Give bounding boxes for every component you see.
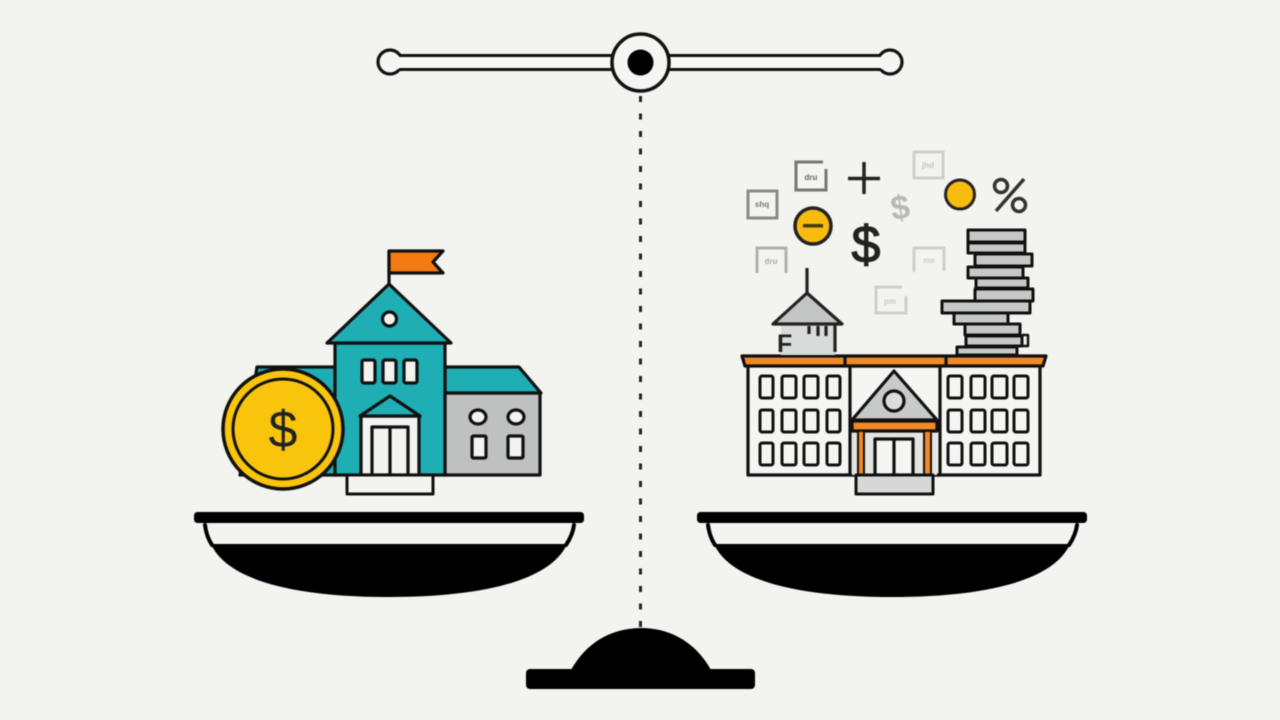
university portico [850,366,940,475]
orange roof band [742,356,1046,366]
beam pivot [612,34,669,91]
scale base [526,628,755,689]
document icon 5 [914,248,944,272]
left window grid [760,376,840,465]
large university building [742,356,1046,494]
document icon 2 [796,162,826,190]
icon: percent sign [994,179,1026,212]
document icon 1: shq [755,200,769,209]
document icon 4: dru [765,257,778,266]
central tower [327,284,451,475]
right wing [445,367,541,475]
left wing [240,367,336,475]
document icon 2: dru [805,173,818,182]
university walls [748,365,1040,475]
document icon 3 [914,152,943,178]
document icon 5: ms [923,256,935,265]
flag [389,251,443,285]
document icon 6 [876,287,906,313]
school entrance [360,396,420,475]
stack of coins [942,230,1033,355]
right pan [697,512,1087,597]
small school building [240,251,541,494]
document icons [748,152,944,313]
university steps [856,475,933,494]
dashed scale post [639,96,642,630]
school steps [347,475,433,494]
small cupola tower: F [777,330,792,358]
document icon 6: pm [884,297,896,306]
icon: faded dollar sign: $ [888,188,912,228]
dollar coin [223,369,343,489]
document icon 4 [757,248,786,273]
small cupola tower [773,268,842,358]
icon: large dollar sign: $ [852,216,881,274]
icon: minus coin [795,208,831,244]
document icon 1 [748,191,777,218]
icon: yellow coin [946,180,974,209]
scale beam [378,34,902,91]
left pan [194,512,584,597]
right window grid [948,376,1028,465]
dollar coin: $ [269,401,298,459]
icon: plus sign [848,162,880,194]
document icon 3: jhd [921,161,934,170]
